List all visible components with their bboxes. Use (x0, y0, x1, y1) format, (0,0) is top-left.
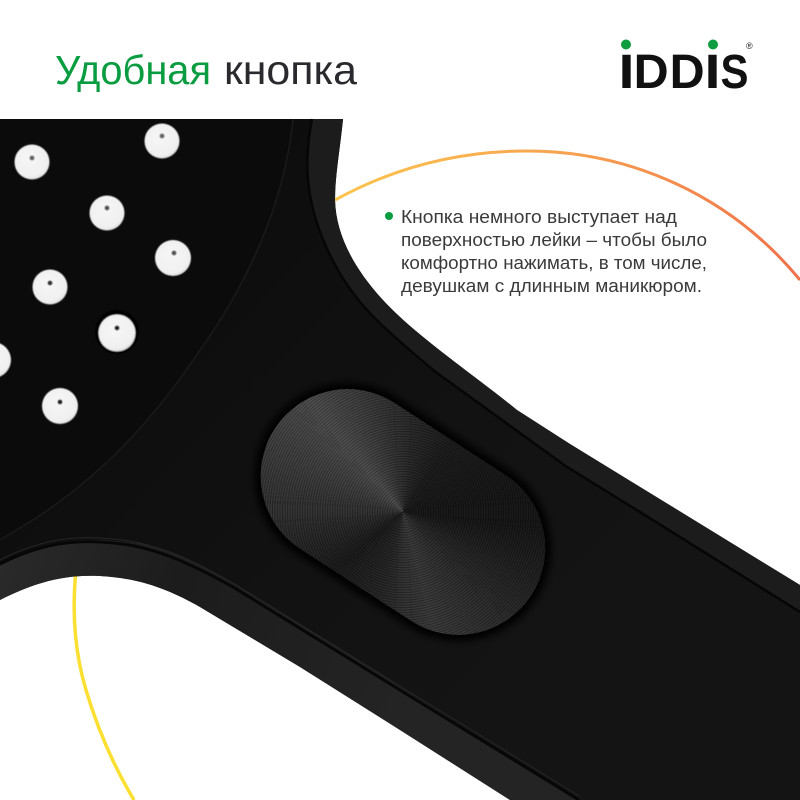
button with brushed metal finish (227, 356, 579, 668)
bullet (385, 212, 393, 220)
nozzle 8 (42, 388, 78, 424)
logo: IDDIS: I (618, 46, 634, 99)
title: кнопка (224, 47, 357, 93)
nozzles (0, 124, 191, 424)
description text: девушкам с длинным маникюром. (401, 276, 702, 296)
nozzle 6 (95, 310, 139, 354)
decorative arc: yellow (74, 570, 134, 800)
nozzle 1 (14, 144, 50, 180)
description text: комфортно нажимать, в том числе, (401, 253, 707, 273)
logo: IDDIS: ® (746, 41, 753, 51)
description text: Кнопка немного выступает над (401, 207, 678, 227)
decorative arc: orange (335, 151, 800, 280)
title: Удобная (55, 47, 211, 93)
description text: поверхностью лейки – чтобы было (401, 230, 707, 250)
shower head face (0, 119, 293, 540)
nozzle 3 (90, 196, 124, 230)
nozzle 4 (155, 240, 191, 276)
nozzle 7 (0, 342, 11, 378)
upper rim of the handle (307, 119, 800, 612)
lower rim of the handle (0, 540, 579, 800)
lower groove highlight (0, 538, 579, 796)
logo: IDDIS: I (704, 46, 720, 99)
nozzle 5 (32, 270, 68, 304)
upper groove (307, 119, 800, 612)
description text (401, 207, 707, 296)
button recess shadow (219, 347, 587, 677)
logo: IDDIS (618, 40, 753, 99)
logo: IDDIS: D (670, 46, 705, 99)
logo: IDDIS: D (634, 46, 669, 99)
nozzle 2 (144, 124, 180, 158)
lower groove (0, 542, 579, 800)
title (55, 47, 357, 93)
head seam (0, 119, 293, 540)
logo: IDDIS: S (720, 46, 748, 99)
